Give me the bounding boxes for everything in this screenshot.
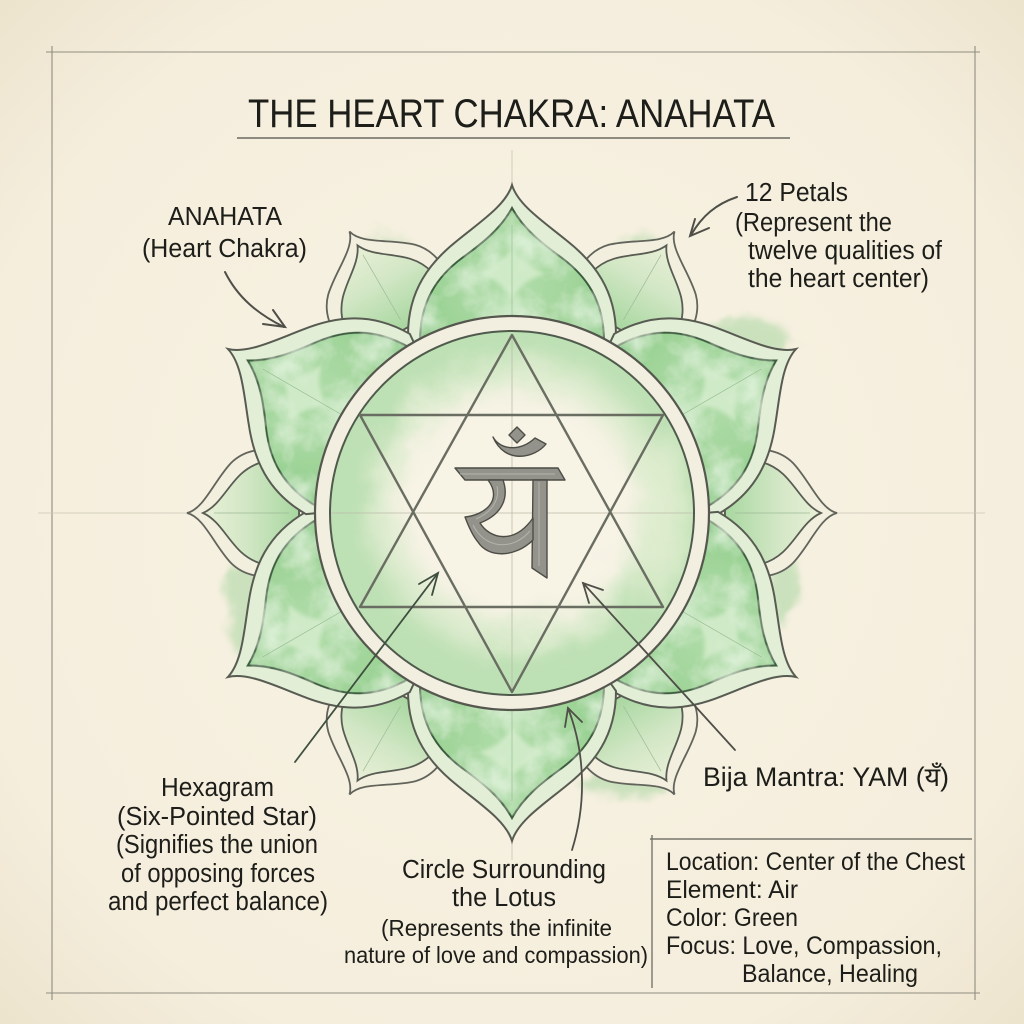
- info box: Color: Green: [666, 904, 798, 932]
- label: 12 Petals: twelve qualities of: [748, 237, 943, 265]
- arrow: Circle: [565, 708, 582, 850]
- arrow: Bija Mantra: [583, 583, 735, 750]
- label: Hexagram: Hexagram: [161, 774, 274, 802]
- label: Circle Surrounding the Lotus: nature of love and compassion): [344, 942, 648, 968]
- info box: Balance, Healing: [742, 960, 918, 988]
- label: 12 Petals: [735, 179, 943, 293]
- label: Anahata: ANAHATA: [168, 203, 282, 231]
- label: Circle Surrounding the Lotus: [344, 856, 648, 968]
- arrow: Hexagram: [295, 573, 438, 762]
- label: Circle Surrounding the Lotus: Circle Surrounding: [402, 856, 606, 884]
- arrow: 12 Petals: [690, 197, 737, 236]
- info box: Focus: Love, Compassion,: [666, 932, 942, 960]
- info box: Location: Center of the Chest: [666, 848, 965, 876]
- lotus: twelve petals: [176, 185, 848, 841]
- title: THE HEART CHAKRA: ANAHATA: [248, 92, 775, 136]
- arrow: Anahata: [225, 272, 285, 327]
- label: Hexagram: and perfect balance): [108, 888, 328, 916]
- info box: Element: Air: [666, 876, 798, 904]
- circle surrounding the lotus: [315, 316, 709, 710]
- info box: [650, 835, 972, 988]
- label: Hexagram: [108, 774, 328, 916]
- large petals: [176, 185, 848, 841]
- hexagram: [360, 335, 663, 692]
- watercolor bleed behind lotus: [226, 236, 799, 797]
- label: 12 Petals: the heart center): [748, 265, 929, 293]
- label: Hexagram: (Signifies the union: [116, 831, 318, 859]
- label: 12 Petals: 12 Petals: [745, 179, 848, 207]
- label: 12 Petals: (Represent the: [735, 209, 892, 237]
- label: Anahata: (Heart Chakra): [142, 235, 307, 263]
- small petals: [187, 199, 837, 827]
- label: Hexagram: of opposing forces: [121, 860, 315, 888]
- label: Circle Surrounding the Lotus: the Lotus: [452, 884, 556, 912]
- icon: bija mantra symbol: [455, 427, 565, 578]
- label: Bija Mantra: Bija Mantra: YAM (यँ): [703, 762, 949, 792]
- label: Hexagram: (Six-Pointed Star): [117, 803, 317, 831]
- label: Anahata: [142, 203, 307, 263]
- label: Circle Surrounding the Lotus: (Represents the infinite: [381, 915, 612, 941]
